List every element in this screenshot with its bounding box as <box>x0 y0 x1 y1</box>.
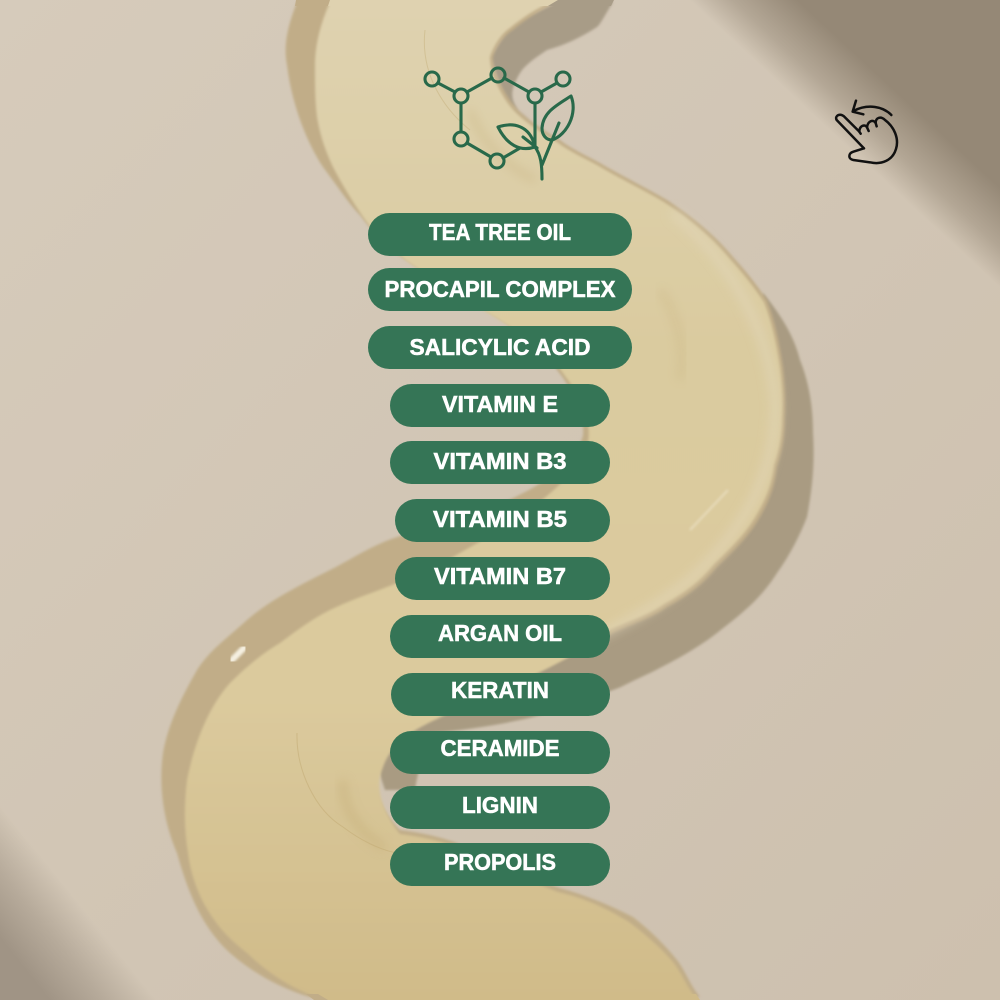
icon: swipe hand <box>836 101 897 163</box>
pill: ceramide <box>390 731 610 774</box>
ingredient pills <box>368 213 632 886</box>
pill: vitamin b3 <box>390 441 610 484</box>
highlights <box>232 648 244 660</box>
gel inner body <box>185 2 782 997</box>
pill: tea tree oil: TEA TREE OIL <box>429 219 571 245</box>
pill: vitamin e: VITAMIN E <box>442 391 558 417</box>
pill: lignin <box>390 786 610 829</box>
pill: vitamin e <box>390 384 610 427</box>
pill: procapil complex <box>368 268 632 311</box>
pill: keratin: KERATIN <box>451 677 549 703</box>
gel edge light band <box>590 212 775 640</box>
pill: salicylic acid: SALICYLIC ACID <box>410 334 590 360</box>
pill: ceramide: CERAMIDE <box>440 735 560 761</box>
pill: procapil complex: PROCAPIL COMPLEX <box>384 276 616 302</box>
icon: molecule with leaves <box>425 68 573 179</box>
pill: propolis <box>390 843 610 886</box>
pill: salicylic acid <box>368 326 632 369</box>
gel edge strips <box>295 0 700 1000</box>
gel cast shadow <box>375 293 814 790</box>
pill: vitamin b3: VITAMIN B3 <box>434 448 566 474</box>
pill: argan oil: ARGAN OIL <box>438 620 562 646</box>
gel inner streaks <box>297 30 682 853</box>
pill: vitamin b7: VITAMIN B7 <box>434 563 566 589</box>
pill: vitamin b5 <box>395 499 610 542</box>
pill: lignin: LIGNIN <box>462 792 538 818</box>
gel swirl <box>161 0 814 1000</box>
pill: propolis: PROPOLIS <box>444 849 556 875</box>
pill: keratin <box>391 673 610 716</box>
pill: tea tree oil <box>368 213 632 256</box>
pill: argan oil <box>390 615 610 658</box>
molecule ring <box>425 68 570 168</box>
gel outer rim <box>161 2 785 997</box>
leaves <box>498 96 573 179</box>
pill: vitamin b7 <box>395 557 610 600</box>
pill: vitamin b5: VITAMIN B5 <box>433 506 567 532</box>
